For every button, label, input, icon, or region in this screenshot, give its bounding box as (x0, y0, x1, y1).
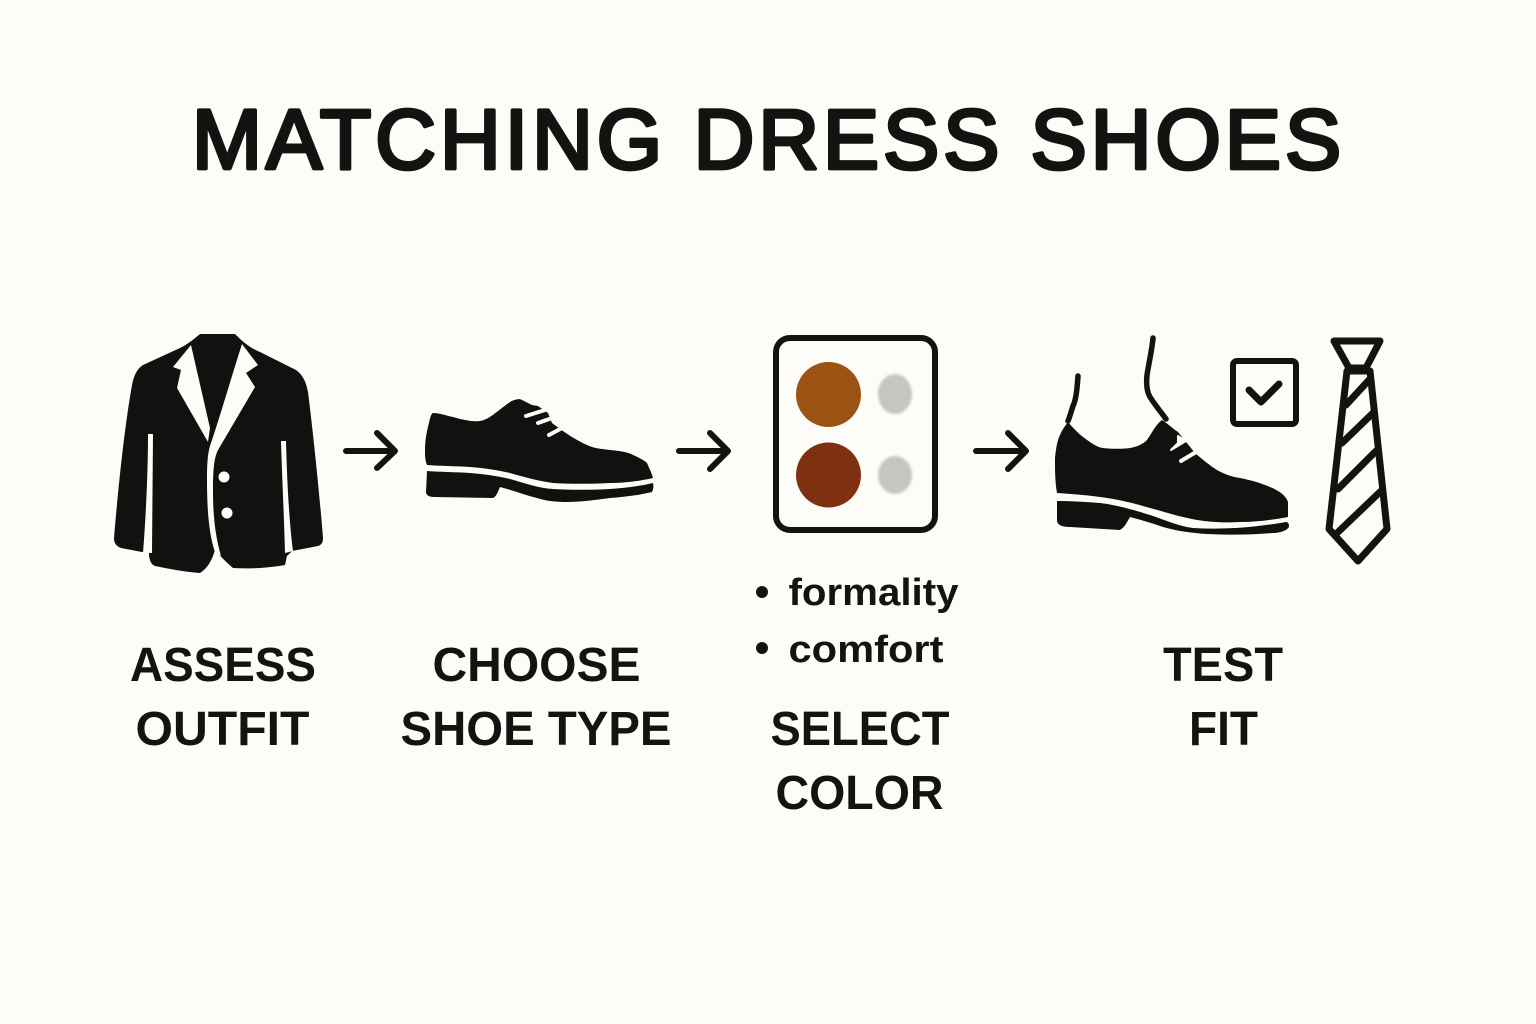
label: choose shoe type (400, 639, 672, 756)
leg outlines (1068, 338, 1166, 421)
icon: dress shoe (425, 399, 653, 502)
icon: suit jacket (114, 334, 323, 573)
lace slit (1181, 452, 1196, 461)
bullet 1 (756, 586, 768, 598)
title: MATCHING DRESS SHOES (192, 92, 1341, 186)
sole (426, 471, 653, 502)
arrow 2 (679, 433, 728, 469)
label: select color: COLOR (776, 767, 944, 820)
bullet 2 (756, 642, 768, 654)
label: test fit: TEST (1163, 639, 1283, 692)
label: assess outfit: OUTFIT (136, 703, 310, 756)
label: test fit (1163, 639, 1283, 756)
button bottom (222, 508, 232, 518)
icon: shoe with foot (1055, 338, 1289, 535)
icon: checkbox (1233, 361, 1296, 424)
label: assess outfit: ASSESS (130, 639, 316, 692)
sole (1057, 501, 1289, 535)
lace highlights (1171, 436, 1186, 450)
button top (218, 472, 230, 482)
lace slits (526, 410, 562, 435)
lapel right and front edge (207, 344, 258, 556)
label: choose shoe type: CHOOSE (432, 639, 640, 692)
icon: striped tie (1329, 341, 1387, 561)
sleeve slit right (281, 441, 293, 553)
label: choose shoe type: SHOE TYPE (400, 703, 672, 756)
swatch: tan (796, 362, 861, 427)
label: select color: SELECT (770, 703, 950, 756)
bullet item: formality: formality (788, 572, 958, 614)
arrow 1 (346, 433, 395, 468)
lapel left (173, 345, 210, 442)
label: test fit: FIT (1189, 703, 1258, 756)
check mark (1249, 384, 1279, 402)
label: assess outfit (130, 639, 316, 756)
arrow 3 (976, 433, 1026, 469)
label: select color (770, 703, 950, 820)
panel: color swatches (776, 338, 935, 530)
bullet item: comfort: comfort (788, 629, 944, 671)
swatch: grey top (878, 374, 912, 414)
swatch: chestnut (796, 442, 861, 508)
sleeve slit left (143, 434, 153, 553)
swatch: grey bottom (878, 456, 912, 494)
text: bullet list (756, 572, 958, 671)
